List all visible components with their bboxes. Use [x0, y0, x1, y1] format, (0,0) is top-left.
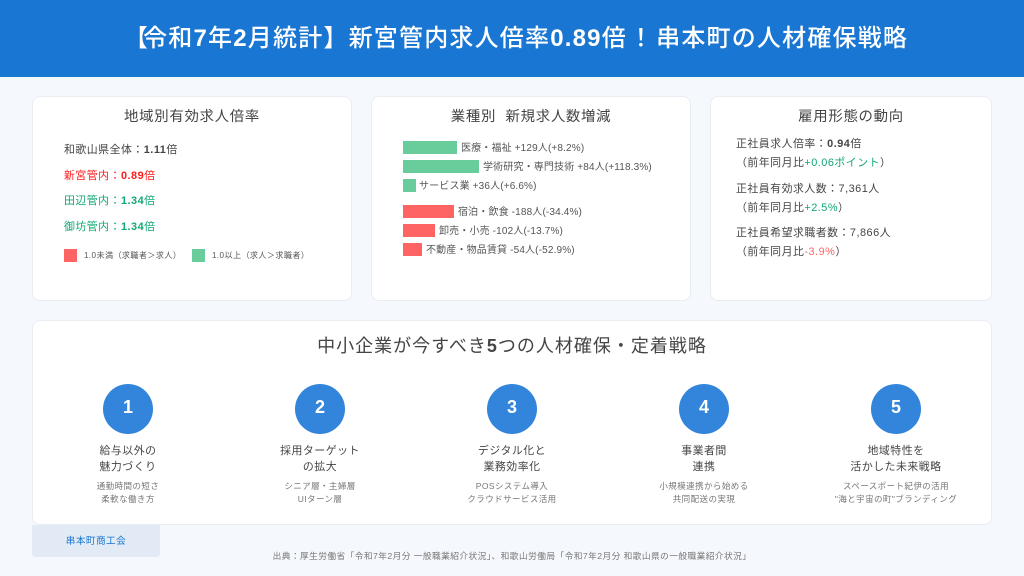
strategy 5 detail: スペースポート紀伊の活用 — [843, 481, 949, 491]
stat: effective job offers: 正社員有効求人数：7,361人 — [736, 183, 880, 195]
strategy 1 title: 給与以外の — [100, 445, 156, 457]
source note: 出典：厚生労働省「令和7年2月分 一般職業紹介状況」、和歌山労働局「令和7年2月分 和歌山県の一般職業紹介状況」 — [273, 551, 751, 561]
number circle 2 — [295, 384, 345, 434]
strategy 1 detail: 柔軟な働き方 — [101, 494, 155, 504]
panel: new job offers by industry — [371, 96, 691, 301]
strategy 1 title: 魅力づくり — [100, 461, 156, 473]
strategy 4 detail: 共同配送の実現 — [673, 494, 735, 504]
strategy 5 detail — [835, 481, 957, 504]
strategy 2 detail — [284, 481, 356, 504]
ratio: Gobo: 御坊管内：1.34倍 — [64, 221, 156, 233]
strategy 4 detail: 小規模連携から始める — [659, 481, 749, 491]
ratio: Tanabe: 田辺管内：1.34倍 — [64, 195, 156, 207]
legend label: above 1.0: 1.0以上（求人＞求職者） — [212, 251, 309, 260]
label: real estate: 不動産・物品賃貸 -54人(-52.9%) — [426, 245, 575, 256]
strategy 4 title: 連携 — [693, 461, 715, 473]
label: lodging: 宿泊・飲食 -188人(-34.4%) — [458, 207, 582, 218]
strategy 1 detail — [97, 481, 159, 504]
strategy 3 title — [478, 444, 546, 473]
strategy 2 detail: UIターン層 — [298, 494, 342, 504]
label: wholesale: 卸売・小売 -102人(-13.7%) — [439, 226, 563, 237]
organization badge — [32, 525, 160, 557]
number circle 3 — [487, 384, 537, 434]
strategy 5 detail: "海と宇宙の町"ブランディング — [835, 494, 957, 504]
legend label: below 1.0: 1.0未満（求職者＞求人） — [84, 251, 181, 260]
strategy 2 detail: シニア層・主婦層 — [284, 481, 356, 491]
strategy 4 — [659, 384, 749, 504]
number circle 3: 3 — [507, 397, 517, 417]
strategy 5 title: 地域特性を — [868, 445, 924, 457]
strategy 3 detail: クラウドサービス活用 — [467, 494, 557, 504]
stat: regular employee ratio: 正社員求人倍率：0.94倍 — [736, 138, 862, 150]
number circle 1: 1 — [123, 397, 133, 417]
panel: employment type trends — [710, 96, 992, 301]
ratio: Shingu: 新宮管内：0.89倍 — [64, 170, 156, 182]
strategy 3 detail — [467, 481, 557, 504]
strategy 3 detail: POSシステム導入 — [476, 481, 548, 491]
strategy 5 — [835, 384, 957, 504]
header banner — [0, 0, 1024, 77]
number circle 5: 5 — [891, 397, 901, 417]
panel: five strategies — [32, 320, 992, 525]
number circle 4: 4 — [699, 397, 709, 417]
bar: real estate — [403, 243, 422, 256]
strategy 3 title: デジタル化と — [478, 445, 546, 457]
number circle 2: 2 — [315, 397, 325, 417]
label: services: サービス業 +36人(+6.6%) — [419, 181, 537, 192]
strategy 5 title — [850, 444, 942, 473]
number circle 5 — [871, 384, 921, 434]
strategy 3 — [467, 384, 557, 504]
strategy 4 title: 事業者間 — [681, 445, 727, 457]
strategy 2 title: 採用ターゲット — [280, 445, 360, 457]
stat: ratio year on year: （前年同月比+0.06ポイント） — [736, 157, 891, 169]
panel heading: 雇用形態の動向 — [798, 109, 904, 125]
strategy 2 title — [280, 444, 360, 473]
strategy 2 — [280, 384, 360, 504]
strategy 2 title: の拡大 — [303, 461, 337, 473]
panel: regional ratio — [32, 96, 352, 301]
strategies heading: 中小企業が今すべき5つの人材確保・定着戦略 — [317, 336, 707, 356]
panel background — [710, 96, 992, 301]
strategy 5 title: 活かした未来戦略 — [850, 461, 942, 473]
panel heading: 業種別 新規求人数増減 — [451, 109, 611, 125]
panel background — [32, 96, 352, 301]
bar: services — [403, 179, 416, 192]
bar: lodging — [403, 205, 454, 218]
ratio: prefecture: 和歌山県全体：1.11倍 — [64, 144, 178, 156]
label: academic: 学術研究・専門技術 +84人(+118.3%) — [483, 162, 652, 173]
strategy 1 detail: 通勤時間の短さ — [97, 481, 159, 491]
legend — [64, 249, 309, 262]
organization badge: 串本町商工会 — [66, 536, 126, 547]
bar: medical — [403, 141, 457, 154]
label: medical: 医療・福祉 +129人(+8.2%) — [461, 143, 584, 154]
title: 【令和7年2月統計】新宮管内求人倍率0.89倍！串本町の人材確保戦略 — [124, 25, 908, 52]
panel background — [371, 96, 691, 301]
strategy 4 title — [681, 444, 727, 473]
strategy 3 title: 業務効率化 — [484, 461, 540, 473]
stat: seekers year on year: （前年同月比-3.9%） — [736, 246, 847, 258]
strategy 1 — [97, 384, 159, 504]
bar chart — [403, 141, 652, 256]
legend swatch: below 1.0 — [64, 249, 77, 262]
strategy 4 detail — [659, 481, 749, 504]
panel heading: 地域別有効求人倍率 — [124, 109, 260, 125]
number circle 1 — [103, 384, 153, 434]
legend swatch: above 1.0 — [192, 249, 205, 262]
number circle 4 — [679, 384, 729, 434]
bar: wholesale — [403, 224, 435, 237]
stat: job seekers: 正社員希望求職者数：7,866人 — [736, 227, 891, 239]
bar: academic — [403, 160, 479, 173]
strategy 1 title — [100, 444, 156, 473]
stat: offers year on year: （前年同月比+2.5%） — [736, 202, 849, 214]
